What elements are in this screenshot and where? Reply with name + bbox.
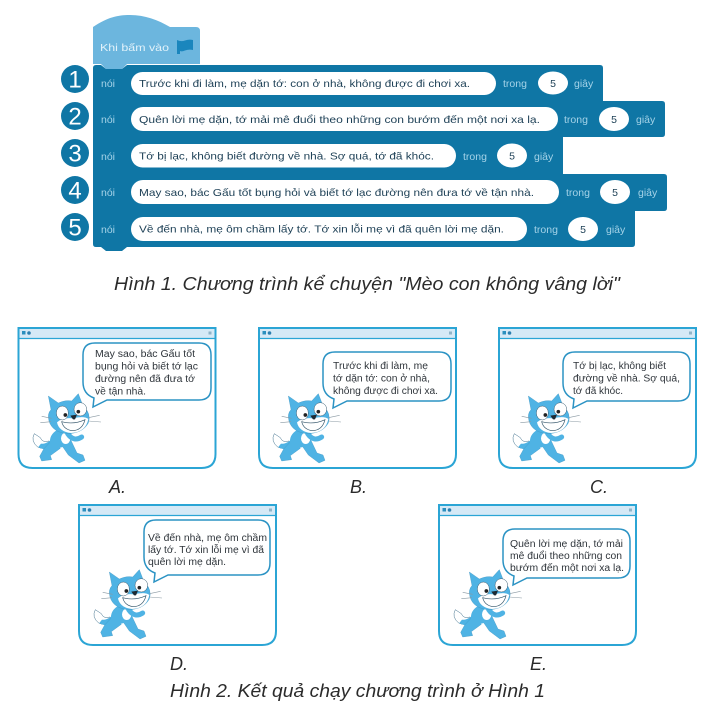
panel: option B	[259, 328, 456, 468]
panel: option A	[18, 328, 216, 468]
icon: scratch cat	[94, 570, 162, 639]
block 3: Tớ bị lạc, không biết đường về nhà. Sợ quá, tớ đã khóc.	[139, 150, 434, 162]
speech bubble A: May sao, bác Gấu tốt	[95, 348, 195, 360]
block 3: giây	[534, 151, 554, 163]
label E: E.	[530, 654, 547, 674]
caption: figure 1: Hình 1. Chương trình kể chuyện "Mèo con không vâng lời"	[114, 274, 622, 294]
hat block: when flag clicked	[93, 15, 200, 69]
block 5: 5	[68, 214, 82, 242]
icon: scratch cat	[513, 394, 581, 463]
block 2	[61, 101, 665, 137]
label C: C.	[590, 477, 608, 497]
speech bubble D	[144, 520, 270, 582]
speech bubble C: đường về nhà. Sợ quá,	[573, 372, 680, 384]
speech bubble B	[323, 352, 451, 408]
speech bubble A: đường nên đã đưa tớ	[95, 374, 195, 385]
block 4: 4	[68, 178, 82, 204]
block 2: trong	[564, 114, 588, 126]
block 1: trong	[503, 78, 527, 90]
speech bubble C	[563, 352, 690, 408]
speech bubble E: mê đuổi theo những con	[510, 550, 622, 562]
block 2: nói	[101, 114, 115, 126]
block 5: nói	[101, 224, 115, 236]
block 2: 2	[68, 104, 82, 130]
block 1: nói	[101, 78, 115, 90]
block 4	[61, 174, 667, 211]
block 5: giây	[606, 224, 626, 236]
block 5: Về đến nhà, mẹ ôm chầm lấy tớ. Tớ xin lỗi mẹ vì đã quên lời mẹ dặn.	[139, 222, 504, 236]
speech bubble B: không được đi chơi xa.	[333, 386, 438, 397]
scratch program: story script	[61, 15, 667, 251]
speech bubble C: tớ đã khóc.	[573, 386, 623, 397]
icon: scratch cat	[454, 570, 522, 639]
block 1: Trước khi đi làm, mẹ dặn tớ: con ở nhà, không được đi chơi xa.	[139, 78, 470, 90]
panel: option C	[499, 328, 696, 468]
speech bubble E: Quên lời mẹ dặn, tớ mải	[510, 539, 623, 550]
block 3: 3	[68, 140, 82, 168]
speech bubble D: lấy tớ. Tớ xin lỗi mẹ vì đã	[148, 543, 264, 556]
block 5: trong	[534, 224, 558, 236]
speech bubble E	[503, 529, 630, 585]
panel: option E	[439, 505, 636, 645]
speech bubble A: bụng hỏi và biết tớ lạc	[95, 360, 198, 372]
block 4: May sao, bác Gấu tốt bụng hỏi và biết tớ lạc đường nên đưa tớ về tận nhà.	[139, 187, 534, 199]
speech bubble D: quên lời mẹ dặn.	[148, 557, 226, 568]
label D: D.	[170, 654, 188, 674]
block 1: 1	[68, 66, 82, 94]
speech bubble A	[83, 343, 211, 407]
hat block: when flag clicked: Khi bấm vào	[100, 42, 169, 54]
block 4: 5	[612, 187, 618, 199]
block 3	[61, 137, 563, 174]
speech bubble A: về tận nhà.	[95, 386, 146, 398]
block 2: giây	[636, 114, 656, 126]
block 4: trong	[566, 187, 590, 199]
speech bubble E: bướm đến một nơi xa lạ.	[510, 562, 624, 574]
block 1	[61, 65, 603, 101]
block 3: nói	[101, 151, 115, 163]
block 3: 5	[509, 150, 515, 162]
block 1: 5	[550, 78, 556, 90]
block 5: 5	[580, 224, 586, 236]
speech bubble D: Về đến nhà, mẹ ôm chầm	[148, 532, 267, 544]
label B: B.	[350, 477, 367, 497]
block 3: trong	[463, 151, 487, 163]
block 4: nói	[101, 187, 115, 199]
caption: figure 2: Hình 2. Kết quả chạy chương trình ở Hình 1	[170, 681, 545, 701]
label A: A.	[108, 477, 126, 497]
block 2: 5	[611, 114, 617, 126]
block 1: giây	[574, 78, 594, 90]
block 2: Quên lời mẹ dặn, tớ mải mê đuổi theo những con bướm đến một nơi xa lạ.	[139, 114, 540, 126]
icon: scratch cat	[33, 394, 101, 463]
block 5	[61, 211, 635, 251]
icon: flag	[177, 40, 193, 54]
speech bubble C: Tớ bị lạc, không biết	[573, 360, 666, 372]
speech bubble B: tớ dặn tớ: con ở nhà,	[333, 372, 430, 384]
speech bubble B: Trước khi đi làm, mẹ	[333, 361, 428, 372]
icon: scratch cat	[273, 394, 341, 463]
block 4: giây	[638, 187, 658, 199]
panel: option D	[79, 505, 276, 645]
